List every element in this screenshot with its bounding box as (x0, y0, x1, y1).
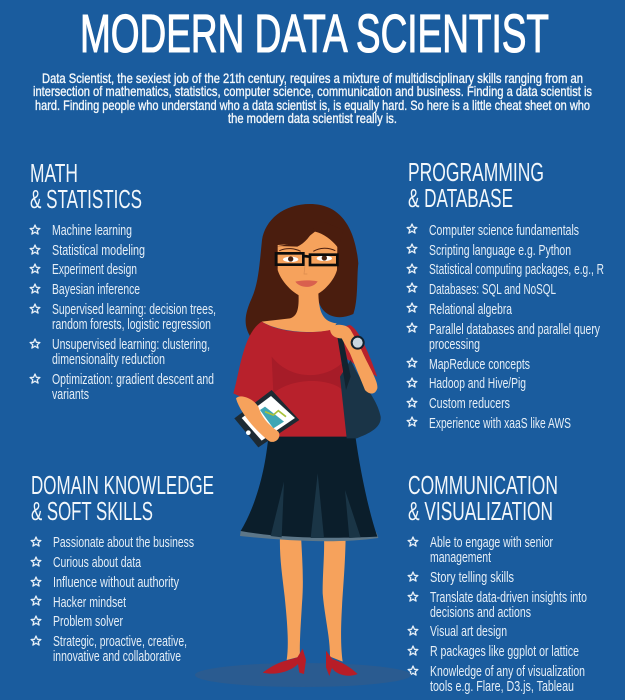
tablet (234, 390, 299, 447)
heading: math and statistics (30, 158, 142, 214)
list: math skills: random forests, logistic regression (52, 317, 211, 333)
list: programming skills: Experience with xaaS like AWS (429, 416, 571, 432)
eyebrows (279, 248, 335, 251)
intro paragraph: the modern data scientist really is. (228, 110, 397, 126)
illustration: data scientist woman (195, 204, 411, 687)
intro paragraph (33, 70, 592, 126)
floor shadow (195, 663, 411, 687)
list: programming skills: MapReduce concepts (429, 357, 530, 373)
list: communication skills: management (430, 550, 491, 566)
bangs (275, 222, 343, 248)
list: math skills: Machine learning (52, 223, 132, 239)
list: domain skills (31, 535, 194, 665)
panel: programming and database (407, 157, 604, 432)
list: math skills: variants (52, 387, 89, 403)
heading: communication and visualization (408, 470, 558, 526)
list: domain skills: Passionate about the business (53, 535, 194, 551)
list: communication skills: decisions and actions (430, 605, 531, 621)
eyes (283, 255, 332, 262)
list: math skills: dimensionality reduction (52, 352, 165, 368)
list: math skills: Optimization: gradient descent and (52, 372, 214, 388)
hair (246, 204, 358, 341)
list: math skills: Supervised learning: decision trees, (52, 302, 216, 318)
face (278, 232, 337, 298)
heading: math and statistics: MATH (30, 158, 78, 188)
heading: programming and database: & DATABASE (408, 183, 513, 213)
list: programming skills: Scripting language e.g. Python (429, 243, 571, 259)
heading: communication and visualization: COMMUNICATION (408, 470, 558, 500)
list: domain skills: innovative and collaborative (53, 649, 181, 665)
heading: programming and database: PROGRAMMING (408, 157, 544, 187)
watch (351, 336, 365, 350)
lips (295, 280, 318, 287)
list: math skills: Bayesian inference (52, 282, 140, 298)
list: domain skills: Hacker mindset (53, 595, 126, 611)
skirt pleats (271, 473, 361, 538)
lower body (240, 433, 378, 676)
list: math skills: Unsupervised learning: clustering, (52, 337, 210, 353)
upper body (233, 204, 381, 447)
list: programming skills: Custom reducers (429, 396, 510, 412)
shirt (233, 322, 377, 437)
glasses (276, 253, 337, 265)
panel: domain knowledge and soft skills (31, 470, 214, 665)
heading: math and statistics: & STATISTICS (30, 184, 142, 214)
neck and chest (262, 290, 337, 332)
skirt (240, 531, 378, 541)
nose (304, 265, 307, 274)
list: communication skills: Able to engage with senior (430, 535, 553, 551)
panel: communication and visualization (408, 470, 587, 695)
list: domain skills: Curious about data (53, 555, 142, 571)
right arm (330, 325, 377, 394)
list: programming skills: Hadoop and Hive/Pig (429, 376, 526, 392)
list: communication skills: Story telling skills (430, 570, 514, 586)
list: programming skills (407, 223, 604, 432)
heading: domain knowledge and soft skills (31, 470, 214, 526)
list: domain skills: Influence without authority (53, 575, 180, 591)
shoes (263, 649, 358, 676)
panel: math and statistics (30, 158, 216, 403)
list: math skills: Experiment design (52, 262, 137, 278)
heading: programming and database (408, 157, 544, 213)
list: domain skills: Strategic, proactive, creative, (53, 634, 187, 650)
list: programming skills: processing (429, 337, 480, 353)
heading: communication and visualization: & VISUALIZATION (408, 496, 553, 526)
heading: domain knowledge and soft skills: & SOFT SKILLS (31, 496, 153, 526)
left arm (236, 396, 279, 442)
list: communication skills: Visual art design (430, 624, 507, 640)
list: programming skills: Databases: SQL and NoSQL (429, 282, 556, 298)
heading: domain knowledge and soft skills: DOMAIN KNOWLEDGE (31, 470, 214, 500)
list: math skills (30, 223, 216, 403)
list: math skills: Statistical modeling (52, 243, 145, 259)
legs (280, 535, 346, 662)
list: programming skills: Relational algebra (429, 302, 513, 318)
list: communication skills: tools e.g. Flare, D3.js, Tableau (430, 679, 574, 695)
bag (337, 335, 381, 438)
list: communication skills (408, 535, 587, 695)
list: domain skills: Problem solver (53, 614, 123, 630)
